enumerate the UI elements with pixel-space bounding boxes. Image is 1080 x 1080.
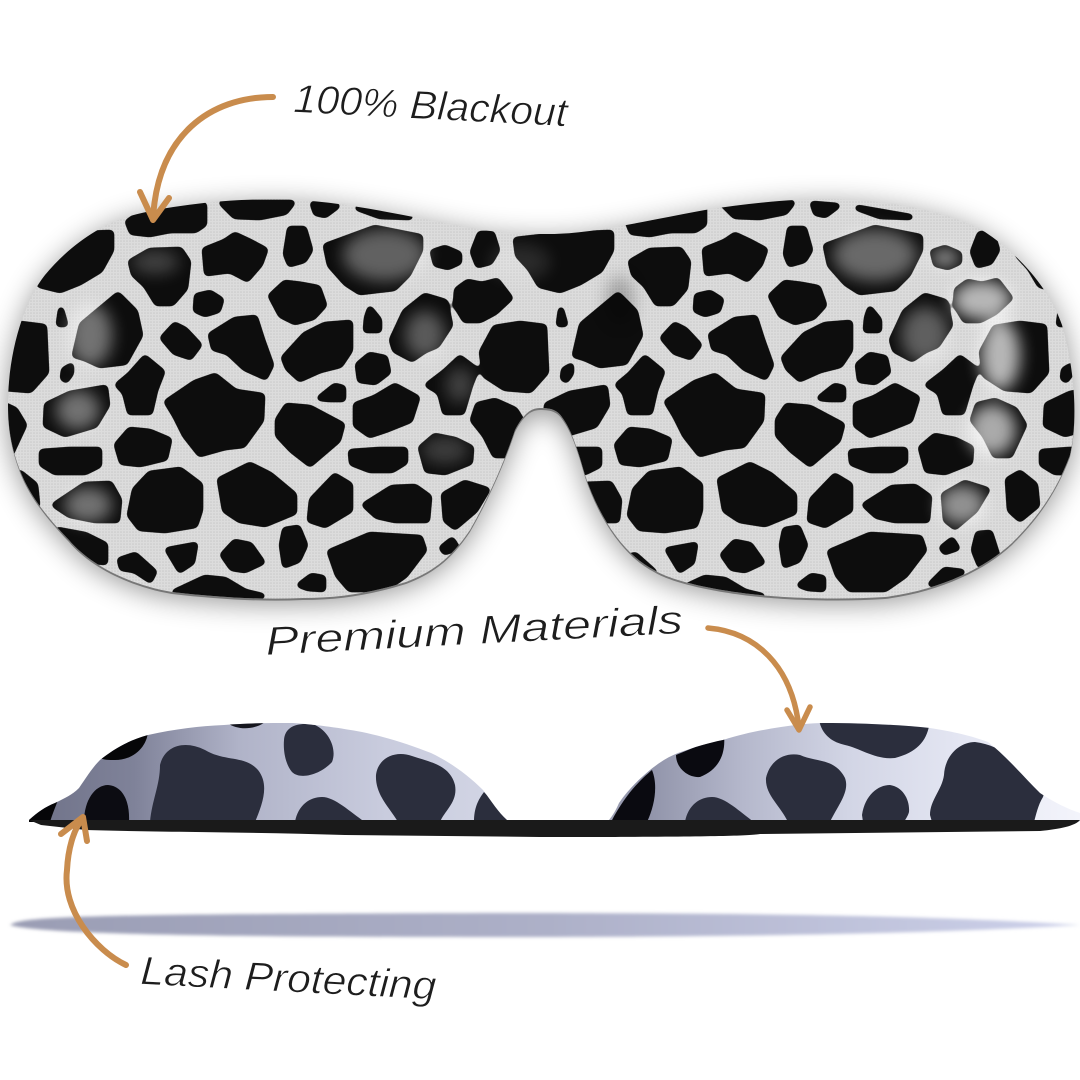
mask top view <box>0 190 1080 610</box>
mask body with cow print <box>0 190 1080 610</box>
label: Lash Protecting: Lash Protecting <box>140 949 437 1008</box>
mask side view <box>25 720 1080 837</box>
floor shadow <box>10 913 1080 937</box>
arrow: premium materials <box>708 628 810 730</box>
black base strip <box>29 820 1080 837</box>
arrow: lash protecting <box>61 817 126 965</box>
mask lower lip <box>8 201 1074 601</box>
label: Premium Materials: Premium Materials <box>264 598 684 664</box>
label: 100% Blackout: 100% Blackout <box>293 77 570 135</box>
side cow print spots <box>25 720 1044 822</box>
mask drop shadow <box>8 204 1074 604</box>
side body <box>29 723 1080 822</box>
arrow: blackout <box>140 97 273 220</box>
